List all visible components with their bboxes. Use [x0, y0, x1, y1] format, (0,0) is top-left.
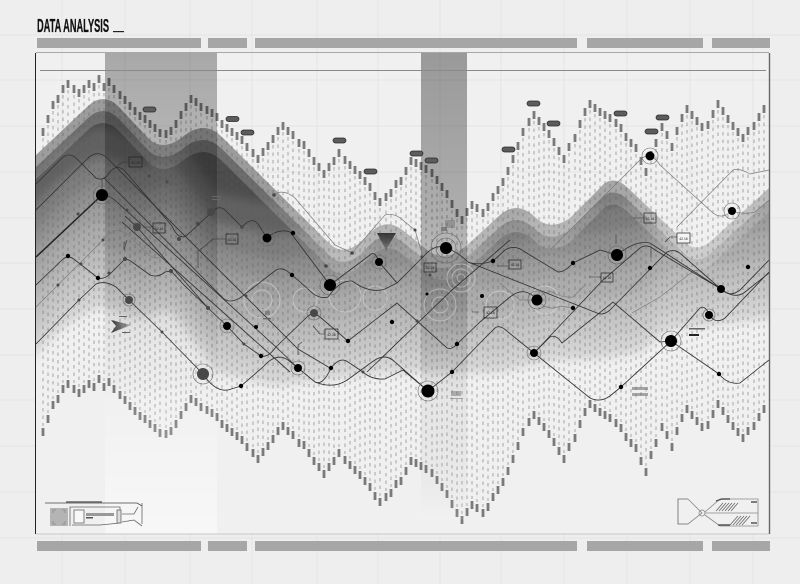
data nodes with rings [56, 148, 750, 401]
triangle marker left [111, 320, 131, 333]
frame [36, 52, 770, 534]
small boxed value labels [102, 157, 690, 339]
small boxed value labels: 42.16 [228, 238, 236, 242]
title: DATA ANALYSIS [37, 16, 109, 36]
title underscore [113, 31, 124, 32]
small boxed value labels: 42.16 [679, 237, 688, 241]
gradient wave bands [36, 99, 769, 534]
small boxed value labels: 42.16 [511, 263, 519, 267]
small boxed value labels: 42.16 [155, 227, 163, 231]
highlight column left [105, 53, 217, 534]
pill tags along the top series [143, 101, 669, 174]
small boxed value labels: 42.16 [646, 217, 654, 221]
highlight column right [421, 53, 467, 520]
tiny annotation marks [119, 196, 705, 399]
candlestick markers: top and bottom series [43, 75, 764, 524]
bottom bar row [37, 541, 770, 551]
horizontal rule under top frame [40, 70, 766, 72]
wire lines network [36, 154, 769, 400]
small boxed value labels: 42.16 [131, 161, 140, 165]
small boxed value labels: 42.16 [426, 266, 434, 270]
small boxed value labels: 42.16 [486, 311, 495, 315]
small boxed value labels: 42.16 [603, 276, 611, 280]
top bar row [37, 38, 770, 48]
HUD widget bottom left [45, 502, 142, 526]
pale concentric rings [244, 264, 559, 321]
faint background wires [36, 156, 769, 313]
small boxed value labels: 42.16 [327, 333, 336, 337]
dotted data columns [43, 85, 764, 514]
HUD widget bottom right [678, 499, 758, 526]
triangle marker top [377, 233, 396, 250]
